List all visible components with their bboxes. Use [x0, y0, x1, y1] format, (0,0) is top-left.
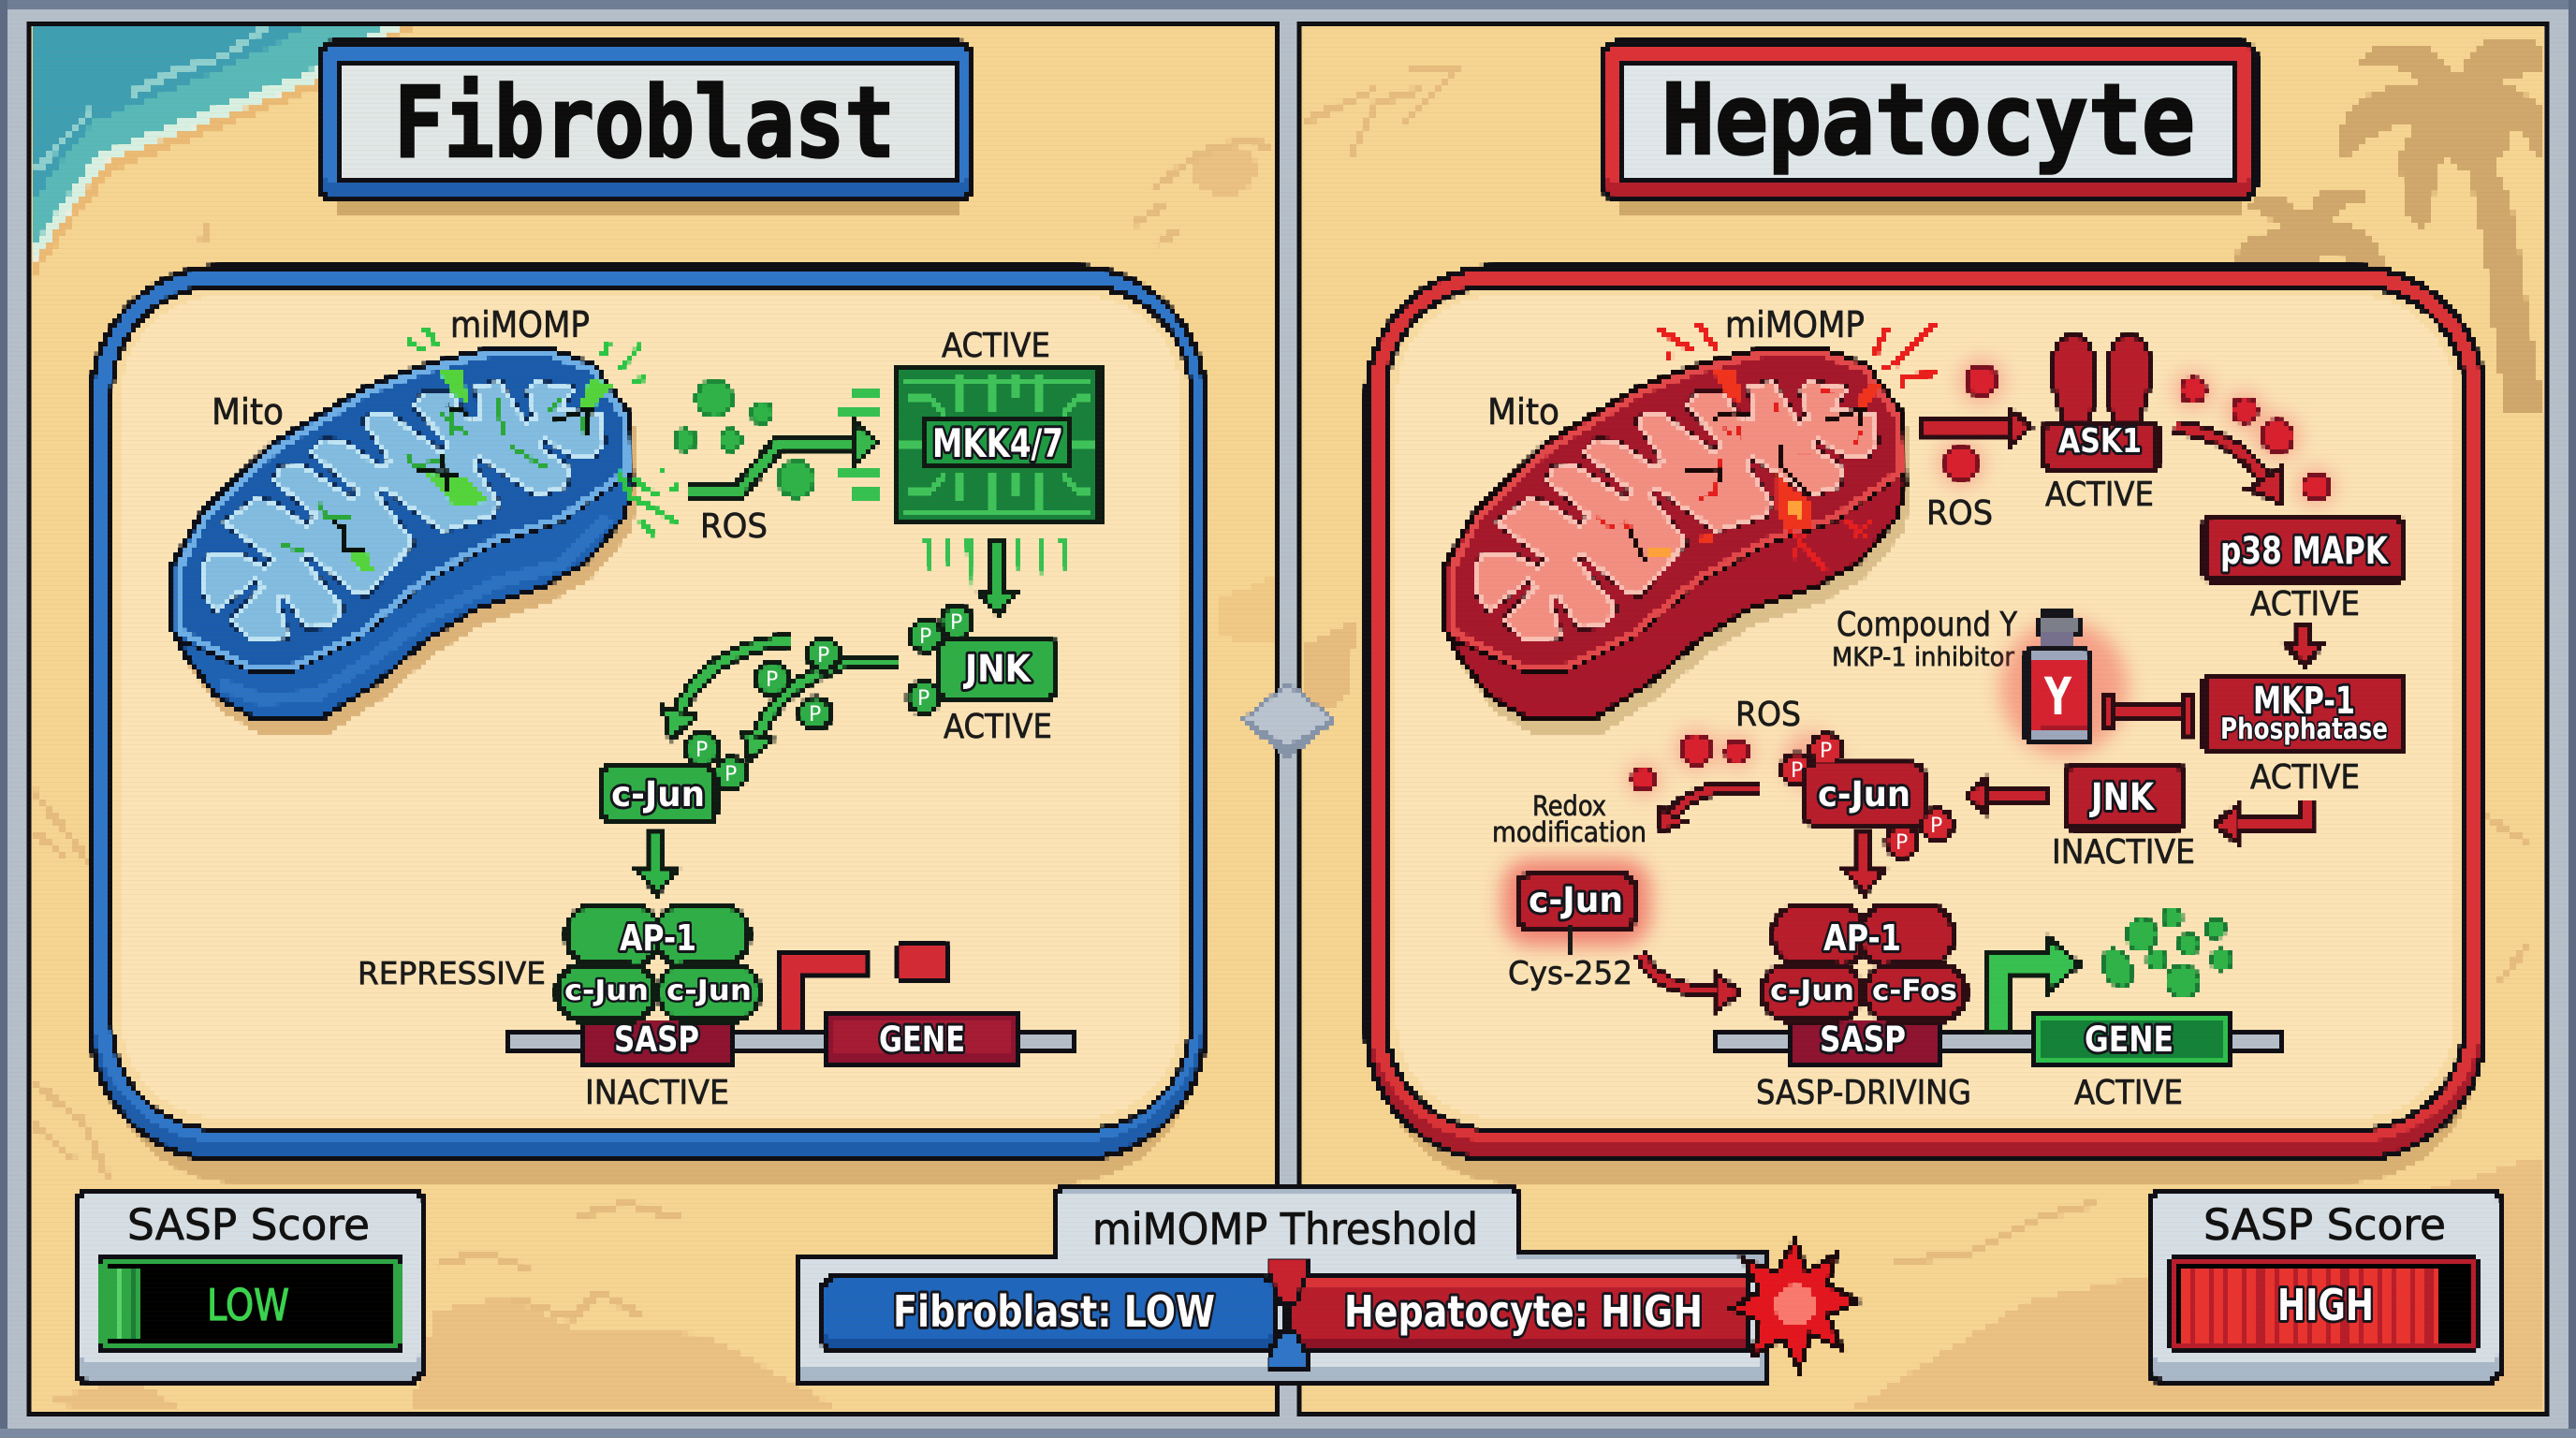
complex: AP-1 c-Jun c-Jun: c-Jun	[564, 975, 649, 1007]
DNA strand with active gene	[1713, 937, 2286, 1067]
arrow: JNK to c-Jun	[1966, 777, 2047, 814]
arrow: MKK to JNK	[979, 539, 1017, 615]
protein: c-Jun redox modified	[1502, 859, 1650, 955]
panel: hepatocyte	[1364, 39, 2487, 1182]
mitochondrion (red)	[1445, 323, 1937, 733]
icon: Compound Y vial: Y	[2043, 667, 2072, 726]
protein: c-Jun phosphorylated: P	[1895, 831, 1908, 855]
panel: SASP score high: SASP Score	[2203, 1200, 2446, 1250]
panel: miMOMP threshold: Hepatocyte: HIGH	[1344, 1286, 1703, 1337]
label: ROS: ROS	[1735, 696, 1801, 734]
protein: p38 MAPK	[2202, 516, 2407, 583]
phospho groups in transit: P	[809, 703, 821, 726]
title plate: Fibroblast	[316, 39, 975, 214]
protein: c-Jun phosphorylated	[1781, 732, 1953, 858]
DNA strand with genes	[505, 945, 1077, 1067]
mitochondrion (blue)	[172, 328, 681, 733]
label: Mito: Mito	[212, 391, 284, 433]
icon: Compound Y vial	[2000, 607, 2128, 756]
label: INACTIVE JNK: INACTIVE	[2052, 833, 2195, 872]
phospho groups in transit: P	[766, 668, 778, 692]
label: ACTIVE JNK: ACTIVE	[944, 708, 1052, 746]
arrow: MKP-1 to JNK	[2215, 800, 2306, 843]
phospho groups on JNK: P	[919, 625, 931, 649]
complex: AP-1 c-Jun c-Fos: AP-1	[1823, 917, 1901, 959]
title plate: Hepatocyte: Hepatocyte	[1661, 63, 2195, 177]
protein: ASK1: ASK1	[2058, 422, 2142, 461]
arrow: c-Jun to AP-1	[638, 833, 676, 894]
arrow: p38 to MKP-1	[2286, 624, 2323, 666]
phospho groups on JNK: P	[950, 611, 962, 635]
label: Compound Y: Compound Y	[1837, 606, 2018, 644]
SASP factor particles	[2097, 908, 2232, 997]
label: REPRESSIVE: REPRESSIVE	[358, 955, 546, 991]
title plate: Hepatocyte	[1600, 39, 2259, 214]
complex: AP-1 c-Jun c-Fos: c-Fos	[1872, 975, 1957, 1007]
panel: miMOMP threshold	[797, 1188, 1765, 1385]
inhibition bar	[2103, 694, 2194, 735]
protein: c-Jun phosphorylated: c-Jun	[611, 774, 705, 814]
protein: JNK inactive: JNK	[2088, 776, 2156, 819]
arrow: ROS to ASK1	[1920, 408, 2031, 446]
protein: c-Jun phosphorylated: P	[1791, 759, 1803, 783]
panel: miMOMP threshold: Fibroblast: LOW	[893, 1286, 1215, 1337]
phospho groups in transit	[756, 638, 840, 729]
arrow: ROS to MKK4/7	[690, 421, 878, 491]
arrows: phosphorylation cascade	[663, 640, 900, 760]
phospho groups on JNK: P	[917, 687, 929, 711]
label: ACTIVE p38: ACTIVE	[2250, 585, 2360, 624]
phospho groups in transit: P	[817, 644, 829, 668]
panel: SASP score high	[2148, 1188, 2503, 1385]
panel: SASP score low: SASP Score	[127, 1200, 370, 1250]
arrow: Cys-252 to AP-1	[1641, 953, 1741, 1009]
protein: c-Jun phosphorylated	[598, 733, 747, 826]
protein: c-Jun phosphorylated: P	[1930, 814, 1942, 838]
protein: c-Jun phosphorylated: P	[1820, 740, 1832, 763]
protein: MKP-1 Phosphatase: MKP-1	[2253, 680, 2355, 723]
DNA strand with active gene: GENE	[2085, 1020, 2174, 1060]
complex: AP-1 c-Jun c-Fos	[1763, 904, 1966, 1020]
arrow: c-Jun to AP-1	[1846, 833, 1883, 894]
panel: fibroblast	[89, 39, 1208, 1182]
protein: JNK: JNK	[962, 648, 1032, 691]
cell membrane	[89, 264, 1208, 1182]
chip: MKK4/7: MKK4/7	[932, 420, 1063, 466]
panel: miMOMP threshold: miMOMP Threshold	[1092, 1204, 1478, 1255]
DNA strand with active gene: SASP	[1820, 1020, 1906, 1060]
protein: MKP-1 Phosphatase: Phosphatase	[2220, 712, 2388, 746]
chip: MKK4/7	[838, 366, 1103, 588]
label: SASP-DRIVING: SASP-DRIVING	[1756, 1074, 1971, 1112]
title plate: Fibroblast: Fibroblast	[394, 66, 895, 180]
label: INACTIVE: INACTIVE	[585, 1074, 729, 1112]
label: Cys-252: Cys-252	[1508, 955, 1632, 992]
divider diamond	[1240, 682, 1337, 759]
phospho groups on JNK	[908, 606, 973, 713]
label: miMOMP: miMOMP	[450, 304, 590, 345]
label: miMOMP: miMOMP	[1725, 304, 1865, 345]
complex: AP-1 c-Jun c-Fos: c-Jun	[1770, 975, 1854, 1007]
complex: AP-1 c-Jun c-Jun: AP-1	[620, 917, 696, 959]
panel: SASP score low	[74, 1188, 425, 1385]
label: ACTIVE ASK1: ACTIVE	[2045, 476, 2154, 514]
protein: c-Jun phosphorylated: c-Jun	[1818, 774, 1910, 814]
label: MKP-1 inhibitor: MKP-1 inhibitor	[1832, 641, 2014, 672]
cell membrane	[1364, 264, 2487, 1182]
label: Redox modification	[1492, 790, 1647, 848]
protein: ASK1	[2042, 335, 2160, 473]
DNA strand with genes: GENE	[879, 1020, 965, 1060]
protein: c-Jun redox modified: c-Jun	[1529, 880, 1623, 920]
protein: c-Jun phosphorylated: P	[724, 763, 737, 786]
DNA strand with genes: SASP	[614, 1020, 699, 1060]
label: Redox modification: modification	[1492, 816, 1647, 848]
ROS glow particles	[1627, 359, 2334, 796]
protein: c-Jun phosphorylated: P	[695, 739, 708, 762]
complex: AP-1 c-Jun c-Jun: c-Jun	[666, 975, 752, 1007]
label: ACTIVE gene: ACTIVE	[2074, 1074, 2183, 1112]
label: ROS: ROS	[1926, 494, 1993, 533]
protein: p38 MAPK: p38 MAPK	[2220, 530, 2390, 573]
label: ACTIVE MKP-1: ACTIVE	[2250, 758, 2360, 797]
label: Mito: Mito	[1487, 391, 1559, 433]
arrow: ASK1 to p38	[2174, 427, 2280, 504]
panel: SASP score high: HIGH	[2277, 1280, 2374, 1330]
label: Redox modification: Redox	[1532, 790, 1606, 822]
ROS particles	[675, 381, 814, 497]
protein: JNK	[936, 636, 1060, 702]
protein: JNK inactive	[2062, 763, 2188, 831]
icon: starburst	[1732, 1240, 1859, 1371]
label: ACTIVE MKK: ACTIVE	[942, 327, 1050, 365]
protein: MKP-1 Phosphatase	[2202, 672, 2407, 756]
arrow: ROS to redox	[1659, 788, 1760, 831]
label: ROS: ROS	[700, 507, 768, 546]
complex: AP-1 c-Jun c-Jun	[557, 904, 759, 1020]
panel: SASP score low: LOW	[207, 1280, 289, 1330]
